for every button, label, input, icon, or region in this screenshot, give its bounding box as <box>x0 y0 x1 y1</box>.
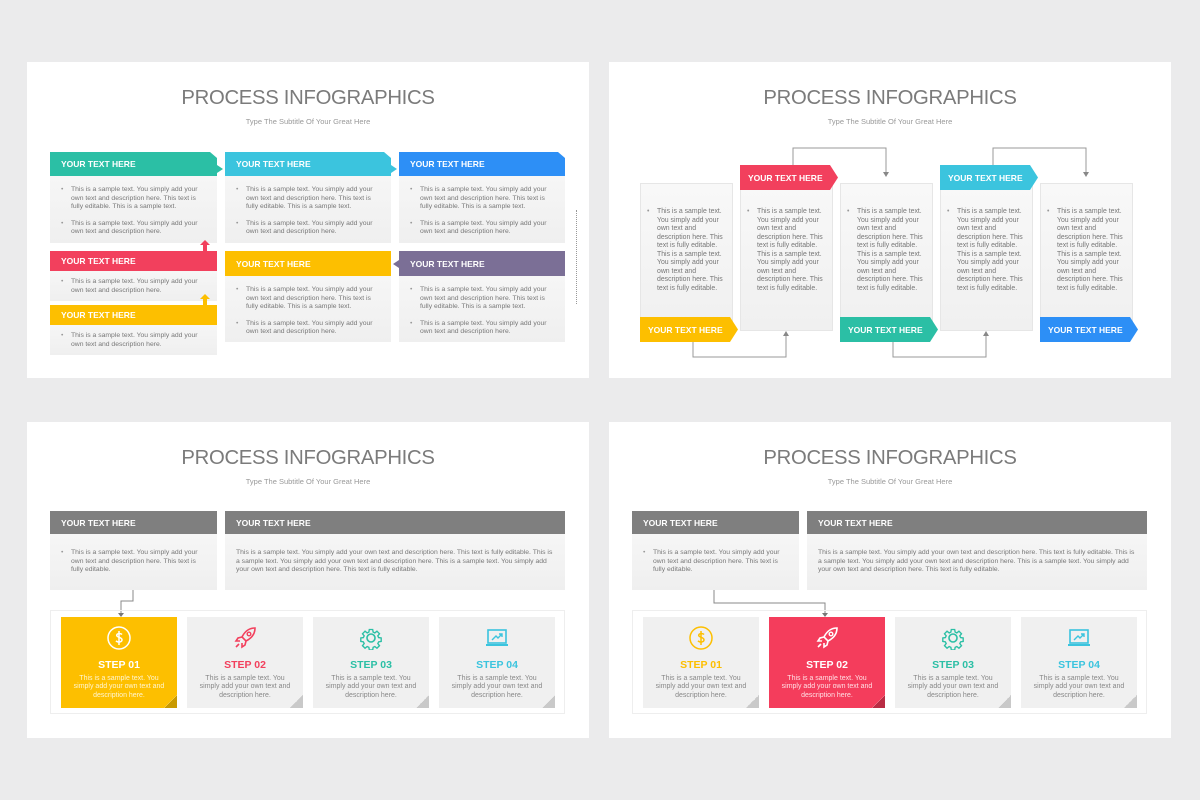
step 01 <box>61 617 177 708</box>
step 03 <box>895 617 1011 708</box>
header: gray right: YOUR TEXT HERE <box>818 518 893 528</box>
step 03: This is a sample text. You simply add your own text and description here. <box>326 675 416 699</box>
step 02: STEP 02 <box>224 659 266 671</box>
connector <box>118 590 134 617</box>
title: PROCESS INFOGRAPHICS <box>181 87 435 109</box>
curl 4 <box>1124 695 1137 708</box>
subtitle: Type The Subtitle Of Your Great Here <box>828 477 952 486</box>
tag: red <box>740 165 838 190</box>
panel: slide bottom-right <box>609 422 1171 738</box>
body: blue <box>399 176 565 243</box>
body: gray right <box>807 534 1147 590</box>
body: red <box>50 271 217 301</box>
header: yellow big <box>225 251 391 276</box>
column 3: This is a sample text. You simply add your own text and description here. This text is fully editable. This is a sample text. You simply add your own text and description here. This text is fully editable. <box>857 208 923 292</box>
header: yellow small: YOUR TEXT HERE <box>61 310 136 320</box>
tag: cyan: YOUR TEXT HERE <box>948 172 1023 182</box>
step 03: STEP 03 <box>350 659 392 671</box>
header: yellow small <box>50 305 217 325</box>
column 4 <box>940 183 1033 331</box>
body: teal: This is a sample text. You simply add your own text and description here. This text is fully editable. This is a sample text. <box>71 186 198 210</box>
icon: rocket <box>816 627 838 648</box>
title: PROCESS INFOGRAPHICS <box>763 87 1017 109</box>
header: cyan <box>225 152 391 176</box>
header: teal <box>50 152 217 176</box>
body: gray right: This is a sample text. You simply add your own text and description here. This text is fully editable. This is a sample text. You simply add your own text and description here. This is a sample text. You simply add your own text and description here. This text is fully editable. <box>236 549 552 573</box>
header: yellow big: YOUR TEXT HERE <box>236 258 311 268</box>
body: gray left: This is a sample text. You simply add your own text and description here. This text is fully editable. <box>653 549 780 573</box>
panel: slide top-left <box>27 62 589 378</box>
icon: gear <box>942 628 964 650</box>
header: gray right <box>807 511 1147 534</box>
header: gray right: YOUR TEXT HERE <box>236 518 311 528</box>
panel: slide bottom-left <box>27 422 589 738</box>
step 02: This is a sample text. You simply add your own text and description here. <box>200 675 290 699</box>
step 01: STEP 01 <box>98 659 140 671</box>
body: purple: This is a sample text. You simply add your own text and description here. This text is fully editable. This is a sample text. <box>420 286 547 310</box>
header: cyan: YOUR TEXT HERE <box>236 159 311 169</box>
body: gray left <box>50 534 217 590</box>
header: red <box>50 251 217 271</box>
header: purple: YOUR TEXT HERE <box>410 258 485 268</box>
step 02 <box>769 617 885 708</box>
body: cyan: This is a sample text. You simply add your own text and description here. This text is fully editable. This is a sample text. <box>246 186 373 210</box>
step 01: STEP 01 <box>680 659 722 671</box>
arrow: purple to yellow <box>393 260 399 268</box>
body: gray right: This is a sample text. You simply add your own text and description here. This text is fully editable. This is a sample text. You simply add your own text and description here. This is a sample text. You simply add your own text and description here. This text is fully editable. <box>818 549 1134 573</box>
body: teal: This is a sample text. You simply add your own text and description here. <box>71 220 198 235</box>
body: yellow big: This is a sample text. You simply add your own text and description here. <box>246 320 373 335</box>
column 2 <box>740 183 833 331</box>
curl 3 <box>998 695 1011 708</box>
step 01: This is a sample text. You simply add your own text and description here. <box>656 675 746 699</box>
step 02: This is a sample text. You simply add your own text and description here. <box>782 675 872 699</box>
subtitle: Type The Subtitle Of Your Great Here <box>246 117 370 126</box>
header: gray left: YOUR TEXT HERE <box>643 518 718 528</box>
arrow: yellow up <box>200 294 210 305</box>
column 5: This is a sample text. You simply add your own text and description here. This text is fully editable. This is a sample text. You simply add your own text and description here. This text is fully editable. <box>1057 208 1123 292</box>
header: blue: YOUR TEXT HERE <box>410 159 485 169</box>
body: purple: This is a sample text. You simply add your own text and description here. <box>420 320 547 335</box>
body: gray right <box>225 534 565 590</box>
panel: slide top-right <box>609 62 1171 378</box>
body: blue: This is a sample text. You simply add your own text and description here. This text is fully editable. This is a sample text. <box>420 186 547 210</box>
header: red: YOUR TEXT HERE <box>61 256 136 266</box>
arrow: teal to cyan <box>217 165 223 173</box>
header: gray left: YOUR TEXT HERE <box>61 518 136 528</box>
tag: yellow: YOUR TEXT HERE <box>648 324 723 334</box>
body: cyan: This is a sample text. You simply add your own text and description here. <box>246 220 373 235</box>
step 02 <box>187 617 303 708</box>
column 3 <box>840 183 933 331</box>
step 01 <box>643 617 759 708</box>
steps container <box>632 610 1147 714</box>
body: yellow big: This is a sample text. You simply add your own text and description here. This text is fully editable. This is a sample text. <box>246 286 373 310</box>
curl 4 <box>542 695 555 708</box>
header: blue <box>399 152 565 176</box>
body: blue: This is a sample text. You simply add your own text and description here. <box>420 220 547 235</box>
title: PROCESS INFOGRAPHICS <box>181 447 435 469</box>
body: cyan <box>225 176 391 243</box>
body: gray left: This is a sample text. You simply add your own text and description here. This text is fully editable. <box>71 549 198 573</box>
tag: red: YOUR TEXT HERE <box>748 172 823 182</box>
subtitle: Type The Subtitle Of Your Great Here <box>828 117 952 126</box>
icon: laptop chart <box>1068 629 1090 646</box>
step 04: This is a sample text. You simply add your own text and description here. <box>452 675 542 699</box>
step 03 <box>313 617 429 708</box>
arrow: cyan to blue <box>391 165 397 173</box>
step 04 <box>439 617 555 708</box>
curl 1 <box>746 695 759 708</box>
tag: teal: YOUR TEXT HERE <box>848 324 923 334</box>
header: purple <box>399 251 565 276</box>
header: teal: YOUR TEXT HERE <box>61 159 136 169</box>
body: gray left <box>632 534 799 590</box>
step 04: STEP 04 <box>1058 659 1100 671</box>
body: teal <box>50 176 217 243</box>
body: yellow big <box>225 276 391 342</box>
step 04: STEP 04 <box>476 659 518 671</box>
icon: dollar <box>689 626 713 650</box>
curl 3 <box>416 695 429 708</box>
icon: laptop chart <box>486 629 508 646</box>
step 01: This is a sample text. You simply add your own text and description here. <box>74 675 164 699</box>
header: gray left <box>632 511 799 534</box>
tag: cyan <box>940 165 1038 190</box>
subtitle: Type The Subtitle Of Your Great Here <box>246 477 370 486</box>
icon: gear <box>360 628 382 650</box>
header: gray right <box>225 511 565 534</box>
step 04: This is a sample text. You simply add your own text and description here. <box>1034 675 1124 699</box>
body: yellow small <box>50 325 217 355</box>
body: yellow small: This is a sample text. You simply add your own text and description here. <box>71 332 198 348</box>
steps container <box>50 610 565 714</box>
title: PROCESS INFOGRAPHICS <box>763 447 1017 469</box>
icon: rocket <box>234 627 256 648</box>
step 04 <box>1021 617 1137 708</box>
column 1 <box>640 183 733 331</box>
arrow: red up <box>200 240 210 251</box>
tag: teal <box>840 317 938 342</box>
header: gray left <box>50 511 217 534</box>
curl 2 <box>872 695 885 708</box>
tag: blue <box>1040 317 1138 342</box>
body: red: This is a sample text. You simply add your own text and description here. <box>71 278 198 294</box>
column 1: This is a sample text. You simply add your own text and description here. This text is fully editable. This is a sample text. You simply add your own text and description here. This text is fully editable. <box>657 208 723 292</box>
dotted connector right <box>571 210 577 304</box>
body: purple <box>399 276 565 342</box>
step 03: This is a sample text. You simply add your own text and description here. <box>908 675 998 699</box>
connectors <box>692 148 1089 358</box>
column 5 <box>1040 183 1133 331</box>
step 03: STEP 03 <box>932 659 974 671</box>
icon: dollar <box>107 626 131 650</box>
curl 1 <box>164 695 177 708</box>
column 2: This is a sample text. You simply add your own text and description here. This text is fully editable. This is a sample text. You simply add your own text and description here. This text is fully editable. <box>757 208 823 292</box>
tag: blue: YOUR TEXT HERE <box>1048 324 1123 334</box>
step 02: STEP 02 <box>806 659 848 671</box>
column 4: This is a sample text. You simply add your own text and description here. This text is fully editable. This is a sample text. You simply add your own text and description here. This text is fully editable. <box>957 208 1023 292</box>
connector <box>714 590 828 617</box>
curl 2 <box>290 695 303 708</box>
tag: yellow <box>640 317 738 342</box>
